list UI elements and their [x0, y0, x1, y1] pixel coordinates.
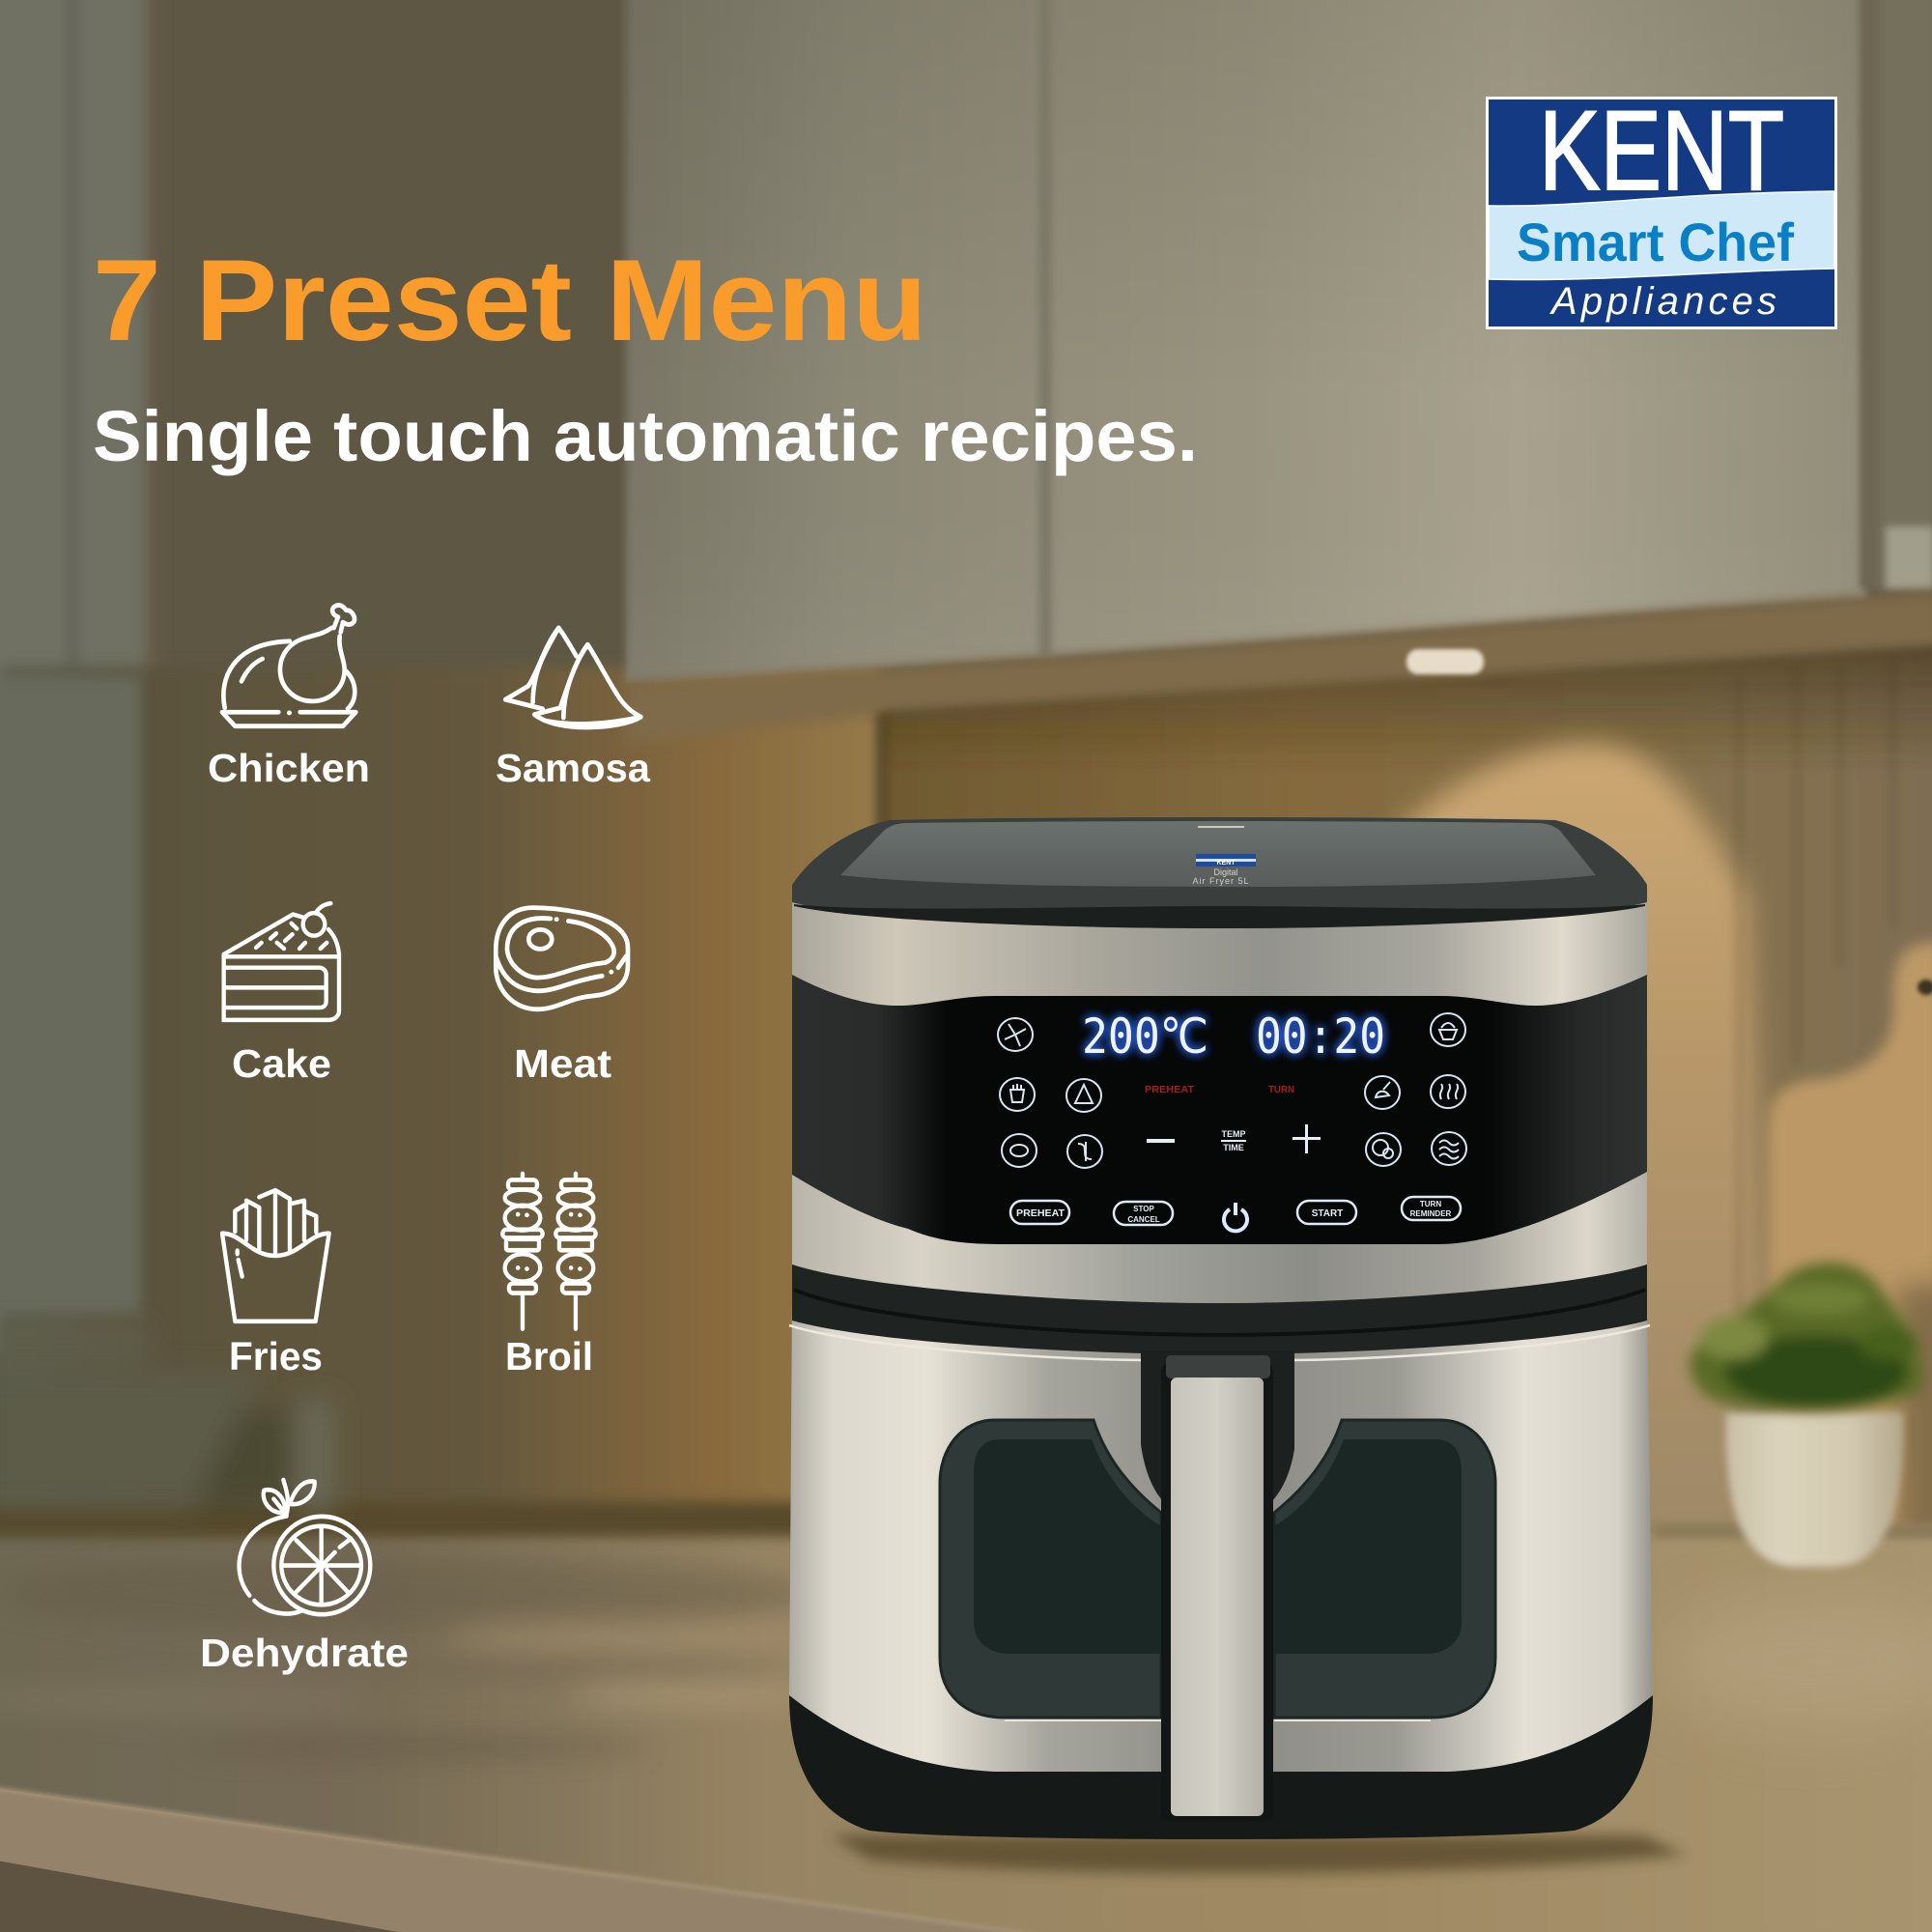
lid top surface — [840, 821, 1596, 887]
window right inner — [1274, 1439, 1462, 1654]
red indicators — [1145, 1085, 1294, 1095]
red indicators: PREHEAT — [1145, 1085, 1194, 1095]
red indicators: TURN — [1268, 1085, 1294, 1095]
cutting board — [1768, 942, 1932, 1536]
lid branding: Air Fryer 5L — [1192, 876, 1250, 886]
icon: meat — [496, 908, 628, 1009]
touch buttons: START — [1312, 1208, 1343, 1219]
preset icons on panel — [998, 1013, 1466, 1168]
icon: fries — [222, 1190, 329, 1321]
dark lid rim — [792, 817, 1647, 928]
touch buttons: PREHEAT — [1016, 1208, 1065, 1219]
label: Meat: Meat — [514, 1041, 611, 1086]
icon: samosa — [505, 628, 640, 727]
temperature and time display — [1082, 1009, 1385, 1065]
icon: cake — [224, 903, 339, 1020]
touch buttons: REMINDER — [1410, 1209, 1452, 1218]
label: Broil: Broil — [505, 1334, 593, 1378]
shelf fascia — [628, 591, 1932, 744]
lower wall left — [0, 667, 881, 1546]
air fryer — [789, 817, 1686, 1873]
lid branding — [1192, 827, 1256, 886]
temp and time controls: TIME — [1223, 1143, 1244, 1152]
collar — [792, 1261, 1647, 1354]
blurred objects at left — [0, 1328, 332, 1512]
handle bracket — [1141, 1350, 1294, 1502]
handle — [1161, 1362, 1273, 1822]
temperature and time display: 00:20 — [1256, 1009, 1385, 1065]
label: Fries: Fries — [229, 1334, 323, 1378]
subtitle: Single touch automatic recipes. — [93, 396, 1198, 476]
logo: KENT Smart Chef Appliances: Smart Chef — [1517, 212, 1794, 272]
logo: KENT Smart Chef Appliances — [1486, 87, 1837, 329]
window left inner — [974, 1439, 1161, 1654]
touch buttons: TURN — [1420, 1200, 1441, 1208]
ceiling spotlight — [1406, 649, 1484, 674]
floor shadow — [831, 1835, 1686, 1873]
icon: chicken — [222, 605, 355, 726]
label: Cake: Cake — [232, 1041, 331, 1086]
touch buttons: STOP — [1133, 1205, 1154, 1213]
lid branding: KENT — [1216, 860, 1236, 867]
second silver band — [792, 1172, 1647, 1303]
upper cabinets — [626, 0, 1932, 683]
title: 7 Preset Menu — [93, 236, 927, 365]
label: Dehydrate: Dehydrate — [200, 1631, 409, 1675]
recessed wall right — [881, 645, 1932, 1546]
base — [789, 1695, 1653, 1839]
icon: dehydrate citrus — [240, 1480, 370, 1614]
label: Samosa: Samosa — [496, 746, 651, 790]
logo: KENT Smart Chef Appliances: Appliances — [1549, 280, 1776, 323]
temp and time controls: TEMP — [1221, 1129, 1246, 1139]
logo: KENT Smart Chef Appliances: KENT — [1539, 87, 1784, 213]
counter front edge — [0, 1786, 1082, 1932]
temp and time controls — [1147, 1124, 1321, 1153]
control panel — [952, 996, 1485, 1244]
window right — [1274, 1420, 1495, 1718]
lid branding: Digital — [1213, 867, 1238, 877]
potted plant — [1690, 1263, 1923, 1567]
window frame at left — [0, 0, 158, 1352]
icon: broil skewers — [502, 1174, 596, 1329]
temperature and time display: 200℃ — [1082, 1009, 1208, 1065]
window left — [940, 1420, 1161, 1718]
touch buttons — [1010, 1197, 1461, 1231]
top silver band — [792, 902, 1647, 1006]
wall light cone — [1391, 744, 1777, 1536]
lower body — [789, 1299, 1653, 1772]
black middle band — [792, 969, 1647, 1251]
touch buttons: CANCEL — [1127, 1215, 1160, 1224]
countertop — [0, 1502, 1932, 1932]
label: Chicken: Chicken — [208, 746, 370, 790]
